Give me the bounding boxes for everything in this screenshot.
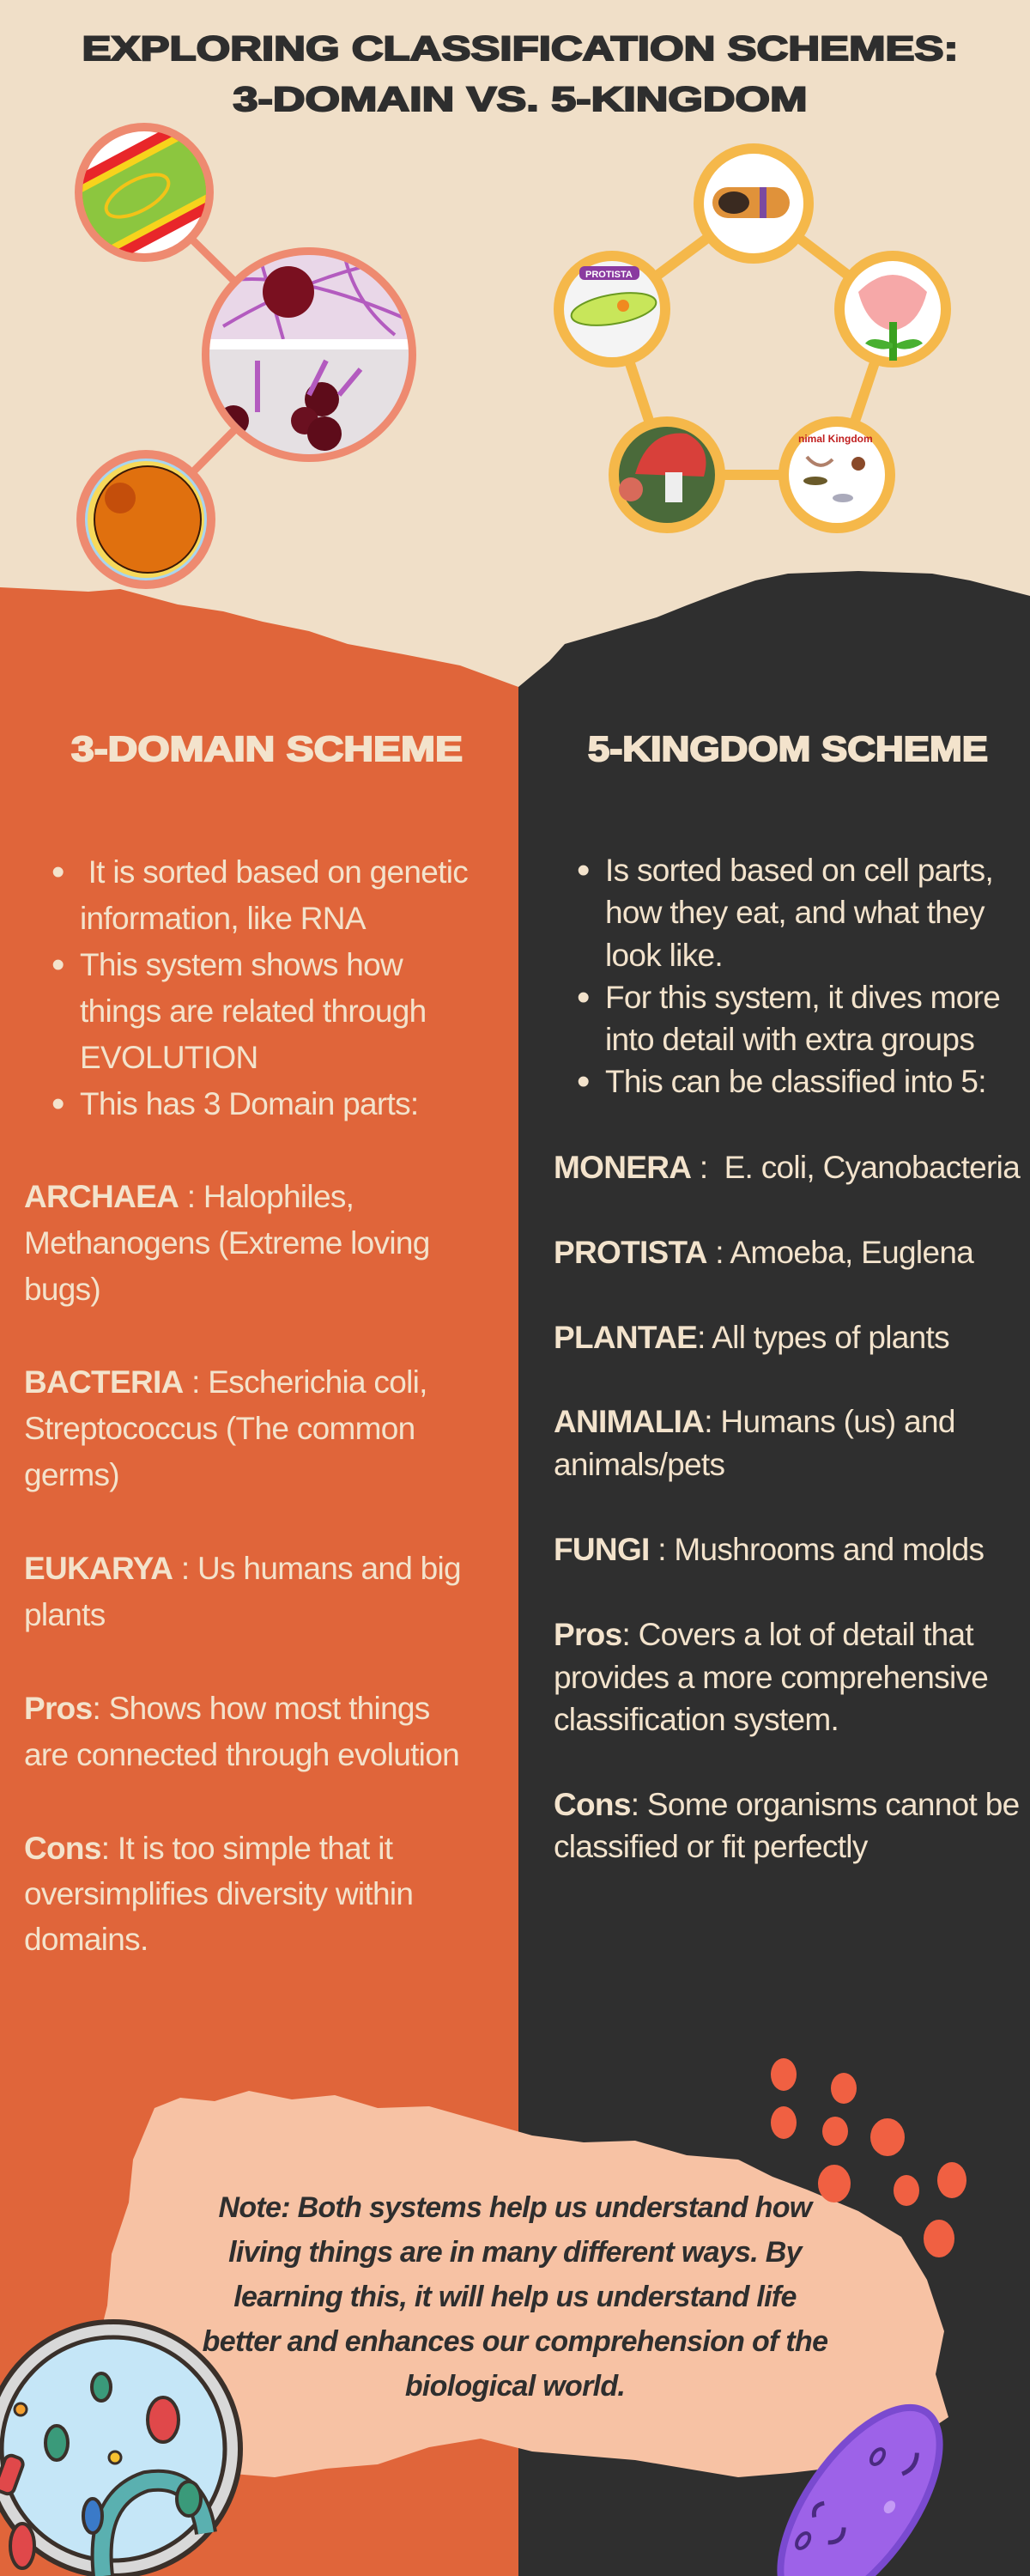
text block: bacteria: Streptococcus (The common: [24, 1411, 415, 1446]
icon: fungal spores micrograph: [206, 249, 412, 461]
note text: Note: Both systems help us understand how: [218, 2191, 812, 2224]
decoration: red dots: [771, 2058, 966, 2257]
text block: 5-kingdom pros: classification system.: [554, 1702, 839, 1737]
text block: 3-domain cons: Cons: It is too simple that it: [24, 1831, 392, 1866]
text block: bacteria: [24, 1364, 427, 1492]
text block: fungi: FUNGI : Mushrooms and molds: [554, 1532, 984, 1567]
note panel: torn paper: [103, 2091, 948, 2477]
text block: 5-kingdom cons: Cons: Some organisms cannot be: [554, 1787, 1019, 1822]
text block: 3-domain bullets: It is sorted based on genetic: [88, 854, 468, 890]
text block: 3-domain bullets: •: [52, 1083, 64, 1125]
text block: 3-domain bullets: EVOLUTION: [80, 1040, 258, 1075]
text block: 3-domain cons: domains.: [24, 1922, 148, 1957]
icon: plant flower: [839, 256, 946, 362]
text block: animalia: [554, 1404, 955, 1482]
text block: 5-kingdom pros: provides a more comprehensive: [554, 1659, 988, 1695]
icon: animal kingdom: [784, 422, 890, 528]
icon: archaea cell: [81, 454, 211, 585]
text block: eukarya: plants: [24, 1597, 106, 1632]
text block: 5-kingdom pros: Pros: Covers a lot of detail that: [554, 1617, 973, 1652]
icon: animal kingdom: nimal Kingdom: [798, 433, 873, 445]
icon: purple bacterium: [777, 2404, 943, 2576]
text block: 3-domain bullets: This system shows how: [80, 947, 403, 982]
text block: 5-kingdom bullets: This can be classified into 5:: [605, 1064, 986, 1099]
icon: protista: [559, 256, 665, 362]
illustration: 3-domain circles: [75, 123, 416, 589]
text block: 5-kingdom bullets: For this system, it dives more: [605, 980, 1000, 1015]
text block: 3-domain bullets: •: [52, 851, 64, 893]
icon: protista: PROTISTA: [585, 270, 633, 280]
text block: 3-domain pros: are connected through evolution: [24, 1737, 459, 1772]
text block: 3-domain bullets: This has 3 Domain parts:: [80, 1086, 418, 1121]
text block: 3-domain bullets: things are related through: [80, 993, 426, 1029]
title: [82, 30, 958, 118]
heading: 5-kingdom scheme: 5-KINGDOM SCHEME: [588, 729, 988, 769]
text block: 5-kingdom bullets: look like.: [605, 938, 723, 973]
text block: archaea: bugs): [24, 1272, 100, 1307]
text block: eukarya: [24, 1551, 461, 1632]
illustration: 5-kingdom circles: [554, 143, 951, 533]
text block: 5-kingdom bullets: •: [577, 976, 590, 1018]
text block: 3-domain cons: [24, 1831, 413, 1957]
text block: bacteria: BACTERIA : Escherichia coli,: [24, 1364, 427, 1400]
note text: biological world.: [405, 2370, 625, 2403]
text block: archaea: ARCHAEA : Halophiles,: [24, 1179, 354, 1214]
text block: 3-domain pros: [24, 1691, 459, 1772]
text block: 5-kingdom bullets: [577, 849, 1000, 1103]
text block: 5-kingdom pros: [554, 1617, 988, 1737]
title: 3-DOMAIN VS. 5-KINGDOM: [233, 81, 807, 118]
text block: eukarya: EUKARYA : Us humans and big: [24, 1551, 461, 1586]
text block: 3-domain pros: Pros: Shows how most things: [24, 1691, 430, 1726]
text block: archaea: Methanogens (Extreme loving: [24, 1225, 430, 1261]
icon: mushroom: [614, 422, 720, 528]
icon: petri dish: [0, 2319, 243, 2576]
text block: animalia: animals/pets: [554, 1447, 724, 1482]
text block: 5-kingdom bullets: Is sorted based on cell parts,: [605, 853, 993, 888]
text block: 5-kingdom cons: classified or fit perfectly: [554, 1829, 868, 1864]
icon: monera bacterium: [699, 149, 809, 258]
text block: archaea: [24, 1179, 430, 1307]
icon: bacterium diagram: [75, 123, 214, 262]
text block: monera: MONERA : E. coli, Cyanobacteria: [554, 1150, 1020, 1185]
text block: 3-domain cons: oversimplifies diversity within: [24, 1876, 413, 1911]
text block: 3-domain bullets: information, like RNA: [80, 901, 366, 936]
note text: learning this, it will help us understand life: [233, 2281, 797, 2313]
text block: bacteria: germs): [24, 1457, 119, 1492]
title: EXPLORING CLASSIFICATION SCHEMES:: [82, 30, 958, 68]
text block: 5-kingdom bullets: •: [577, 849, 590, 891]
heading: 3-domain scheme: 3-DOMAIN SCHEME: [71, 729, 463, 769]
text block: 5-kingdom cons: [554, 1787, 1019, 1864]
note text: [203, 2191, 827, 2403]
text block: 5-kingdom bullets: how they eat, and what they: [605, 895, 985, 930]
text block: plantae: PLANTAE: All types of plants: [554, 1320, 949, 1355]
text block: protista: PROTISTA : Amoeba, Euglena: [554, 1235, 973, 1270]
note text: living things are in many different ways. By: [228, 2236, 802, 2269]
text block: 5-kingdom bullets: into detail with extra groups: [605, 1022, 974, 1057]
text block: animalia: ANIMALIA: Humans (us) and: [554, 1404, 955, 1439]
note text: better and enhances our comprehension of the: [203, 2325, 827, 2358]
text block: 3-domain bullets: •: [52, 944, 64, 986]
text block: 5-kingdom bullets: •: [577, 1060, 590, 1103]
text block: 3-domain bullets: [52, 851, 468, 1125]
